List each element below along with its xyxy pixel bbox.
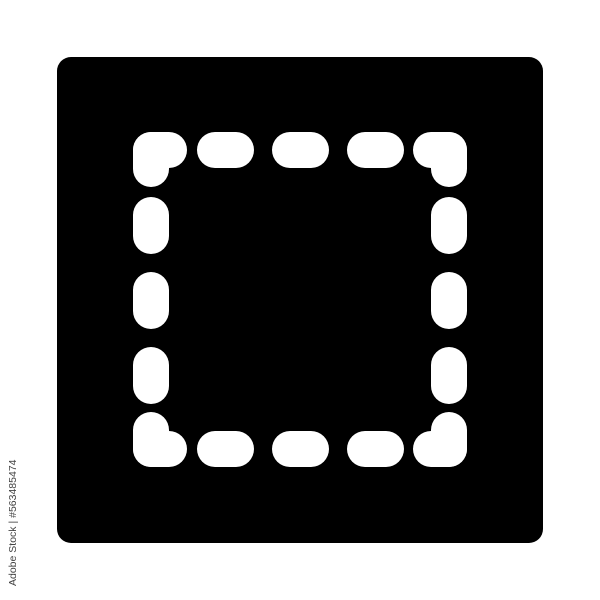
top-left corner <box>133 132 187 168</box>
right dashes <box>431 197 467 254</box>
top-right corner <box>413 132 467 168</box>
dashed white selection frame <box>133 132 467 467</box>
bottom-left corner <box>133 431 187 467</box>
left dashes <box>133 197 169 254</box>
top dashes <box>197 132 254 168</box>
black rounded square background <box>57 57 543 543</box>
bottom-right corner <box>413 431 467 467</box>
bottom dashes <box>197 431 254 467</box>
stock id text: Adobe Stock | #563485474 <box>7 460 19 586</box>
